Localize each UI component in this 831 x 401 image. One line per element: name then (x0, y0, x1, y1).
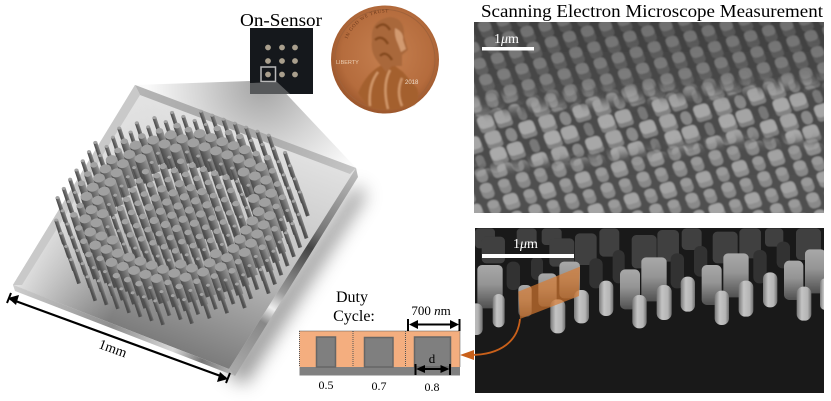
substrate (300, 367, 460, 376)
heading: On-Sensor: On-Sensor (240, 10, 322, 30)
heading: Duty Cycle: Cycle: (333, 308, 375, 325)
SEM scale bar 1 micron (482, 34, 534, 50)
heading: Duty Cycle (333, 289, 375, 325)
penny for scale: 2018 (405, 80, 419, 86)
dimension arrow: 1mm (7, 293, 230, 383)
duty cycle values: 0.7 (372, 379, 386, 393)
duty cycle values (318, 378, 440, 394)
highlighted orange cross-section (518, 267, 580, 319)
plate back edge (135, 85, 356, 174)
Lincoln bust (358, 17, 418, 110)
selected lens marker (261, 67, 276, 82)
pillar width dimension: d: d (429, 351, 436, 366)
penny inscriptions: IN GOD WE TRUST (344, 9, 388, 39)
plate top face (13, 85, 356, 369)
SEM scale bar 1 micron (482, 237, 574, 258)
label: 1mm: 1mm (96, 337, 129, 361)
wedge overlay on sensor (250, 82, 290, 94)
SEM scale bar 1 micron: 1μm (513, 237, 538, 252)
orange callout arrow (460, 319, 520, 360)
rear dark pillars (475, 228, 821, 268)
plate front side (13, 285, 235, 376)
penny for scale: LIBERTY (336, 60, 359, 66)
heading: Scanning Electron Microscope Measurement: Scanning Electron Microscope Measurement (481, 1, 823, 21)
pillar 0.5 (316, 337, 336, 367)
zoom wedge from sensor to plate (135, 81, 358, 170)
heading: Duty Cycle: Duty (336, 289, 368, 306)
SEM image: edge view (464, 228, 830, 393)
penny for scale (331, 6, 439, 114)
period dimension: 700 nm: 700 nm (411, 303, 451, 318)
mid square pillars (477, 249, 826, 317)
plate right side (229, 168, 358, 376)
pillar 0.7 (364, 338, 393, 367)
duty cycle values: 0.8 (424, 380, 440, 394)
SEM scale bar 1 micron: 1μm (494, 32, 519, 47)
orange unit-cell background (300, 331, 460, 368)
unit-cell dotted outlines (300, 331, 460, 367)
SEM image: top view (470, 18, 828, 217)
duty cycle values: 0.5 (318, 378, 334, 392)
on-sensor photo (250, 28, 313, 94)
period dimension: 700 nm (408, 303, 460, 331)
front rounded pillars (464, 272, 830, 335)
pillar 0.8 (414, 337, 450, 367)
plate left edge highlight (13, 85, 140, 285)
metasurface glass plate (13, 85, 358, 376)
plate drop shadow (225, 185, 366, 385)
pillar width dimension: d (416, 351, 450, 375)
nanopillar lens array (6, 85, 358, 350)
duty cycle cross-section diagram (300, 331, 460, 376)
